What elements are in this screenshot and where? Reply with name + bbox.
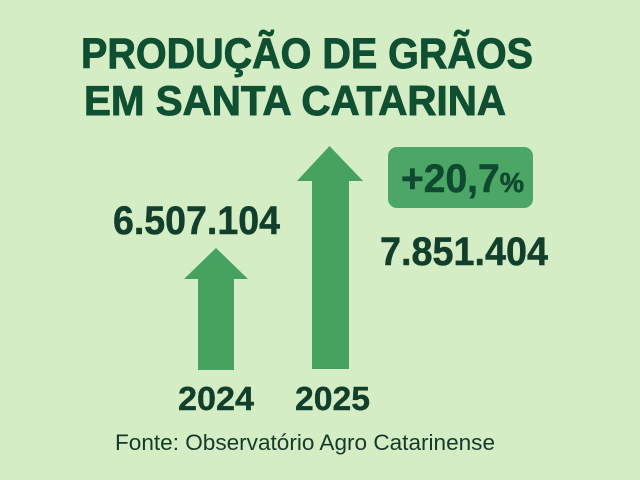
source note: Fonte: Observatório Agro Catarinense [115,430,495,455]
title [81,30,533,124]
callout: growth badge: +20,7% [401,157,524,201]
callout: growth badge [388,147,533,208]
label: year 2024: 2024 [178,380,255,417]
value: 2024: 6.507.104 [113,199,281,243]
value: 2025: 7.851.404 [380,230,549,274]
arrow: 2024 production [184,248,248,370]
title: PRODUÇÃO DE GRÃOS [81,30,533,78]
title: EM SANTA CATARINA [84,77,506,124]
label: year 2025: 2025 [295,380,370,417]
arrow: 2025 production [297,146,363,369]
